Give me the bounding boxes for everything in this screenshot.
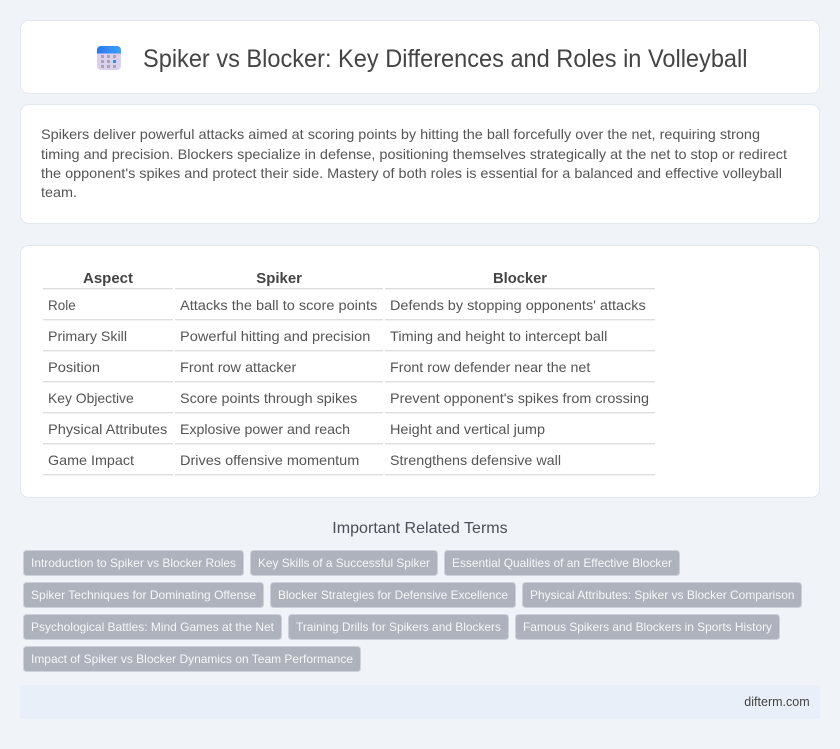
intro paragraph: the opponent's spikes and protect their side. Mastery of both roles is essential for a balanced and effective volleyball: [41, 165, 782, 181]
panel: introduction: [20, 104, 820, 224]
tag: physical attributes: Physical Attributes: Spiker vs Blocker Comparison: [530, 588, 794, 602]
tag: essential qualities: Essential Qualities of an Effective Blocker: [452, 556, 672, 570]
title: Spiker vs Blocker: Key Differences and Roles in Volleyball: [143, 45, 748, 73]
table row: Key Objective: [43, 390, 655, 413]
tag: famous players: Famous Spikers and Blockers in Sports History: [523, 620, 772, 634]
table row: Role: Role: [48, 297, 76, 313]
table row: Physical Attributes: Explosive power and reach: [180, 421, 350, 437]
table header row: Spiker: [256, 270, 302, 287]
table row: Physical Attributes: Height and vertical jump: [390, 421, 545, 437]
table row: Primary Skill: Powerful hitting and precision: [180, 328, 370, 344]
table row: Key Objective: Prevent opponent's spikes from crossing: [390, 390, 649, 406]
tag: training drills: Training Drills for Spikers and Blockers: [296, 620, 501, 634]
tag: famous players: [516, 614, 780, 640]
table row: Physical Attributes: Physical Attributes: [48, 421, 167, 437]
table row: Role: [43, 297, 655, 320]
table row: Role: Attacks the ball to score points: [180, 297, 377, 313]
table row: Game Impact: [43, 452, 655, 475]
table row: Primary Skill: Timing and height to intercept ball: [390, 328, 607, 344]
table row: Key Objective: Score points through spikes: [180, 390, 357, 406]
tag: blocker strategies: Blocker Strategies for Defensive Excellence: [278, 588, 508, 602]
tag: spiker techniques: Spiker Techniques for Dominating Offense: [31, 588, 256, 602]
table row: Key Objective: Key Objective: [48, 390, 134, 406]
tag: physical attributes: [522, 582, 802, 608]
intro paragraph: team.: [41, 184, 77, 200]
tag: key skills: [250, 550, 438, 576]
tag: spiker techniques: [24, 582, 264, 608]
intro paragraph: [41, 126, 787, 200]
table row: Physical Attributes: [43, 421, 655, 444]
table row: Role: Defends by stopping opponents' attacks: [390, 297, 646, 313]
table row: Game Impact: Game Impact: [48, 452, 134, 468]
intro paragraph: Spikers deliver powerful attacks aimed at scoring points by hitting the ball forcefully over the net, requiring strong: [41, 126, 760, 142]
footer source label: difterm.com: [744, 695, 810, 709]
tag: team impact: Impact of Spiker vs Blocker Dynamics on Team Performance: [31, 652, 353, 666]
icon: calendar: [97, 46, 121, 70]
tag: key skills: Key Skills of a Successful Spiker: [258, 556, 430, 570]
tag: blocker strategies: [270, 582, 516, 608]
table row: Game Impact: Drives offensive momentum: [180, 452, 359, 468]
panel: comparison table: [20, 246, 820, 498]
table row: Position: Front row attacker: [180, 359, 297, 375]
table row: Position: Front row defender near the net: [390, 359, 590, 375]
tag: essential qualities: [444, 550, 680, 576]
table row: Primary Skill: Primary Skill: [48, 328, 127, 344]
table row: Position: [43, 359, 655, 382]
table header row: Aspect: [83, 270, 133, 287]
tag: psychological battles: Psychological Battles: Mind Games at the Net: [31, 620, 275, 634]
table header row: Blocker: [493, 270, 547, 287]
footer: [20, 685, 820, 719]
intro paragraph: timing and precision. Blockers specialize in defense, positioning themselves strategically at the net to stop or redirect: [41, 146, 787, 162]
table header row: [43, 270, 655, 289]
panel: header: [20, 20, 820, 94]
table row: Primary Skill: [43, 328, 655, 351]
tag: team impact: [24, 646, 360, 672]
related term tags: [24, 550, 802, 672]
table row: Position: Position: [48, 359, 100, 375]
tag: introduction: Introduction to Spiker vs Blocker Roles: [31, 556, 236, 570]
tag: psychological battles: [24, 614, 282, 640]
tag: introduction: [24, 550, 244, 576]
tag: training drills: [288, 614, 508, 640]
table row: Game Impact: Strengthens defensive wall: [390, 452, 561, 468]
heading: related terms: Important Related Terms: [332, 520, 508, 537]
